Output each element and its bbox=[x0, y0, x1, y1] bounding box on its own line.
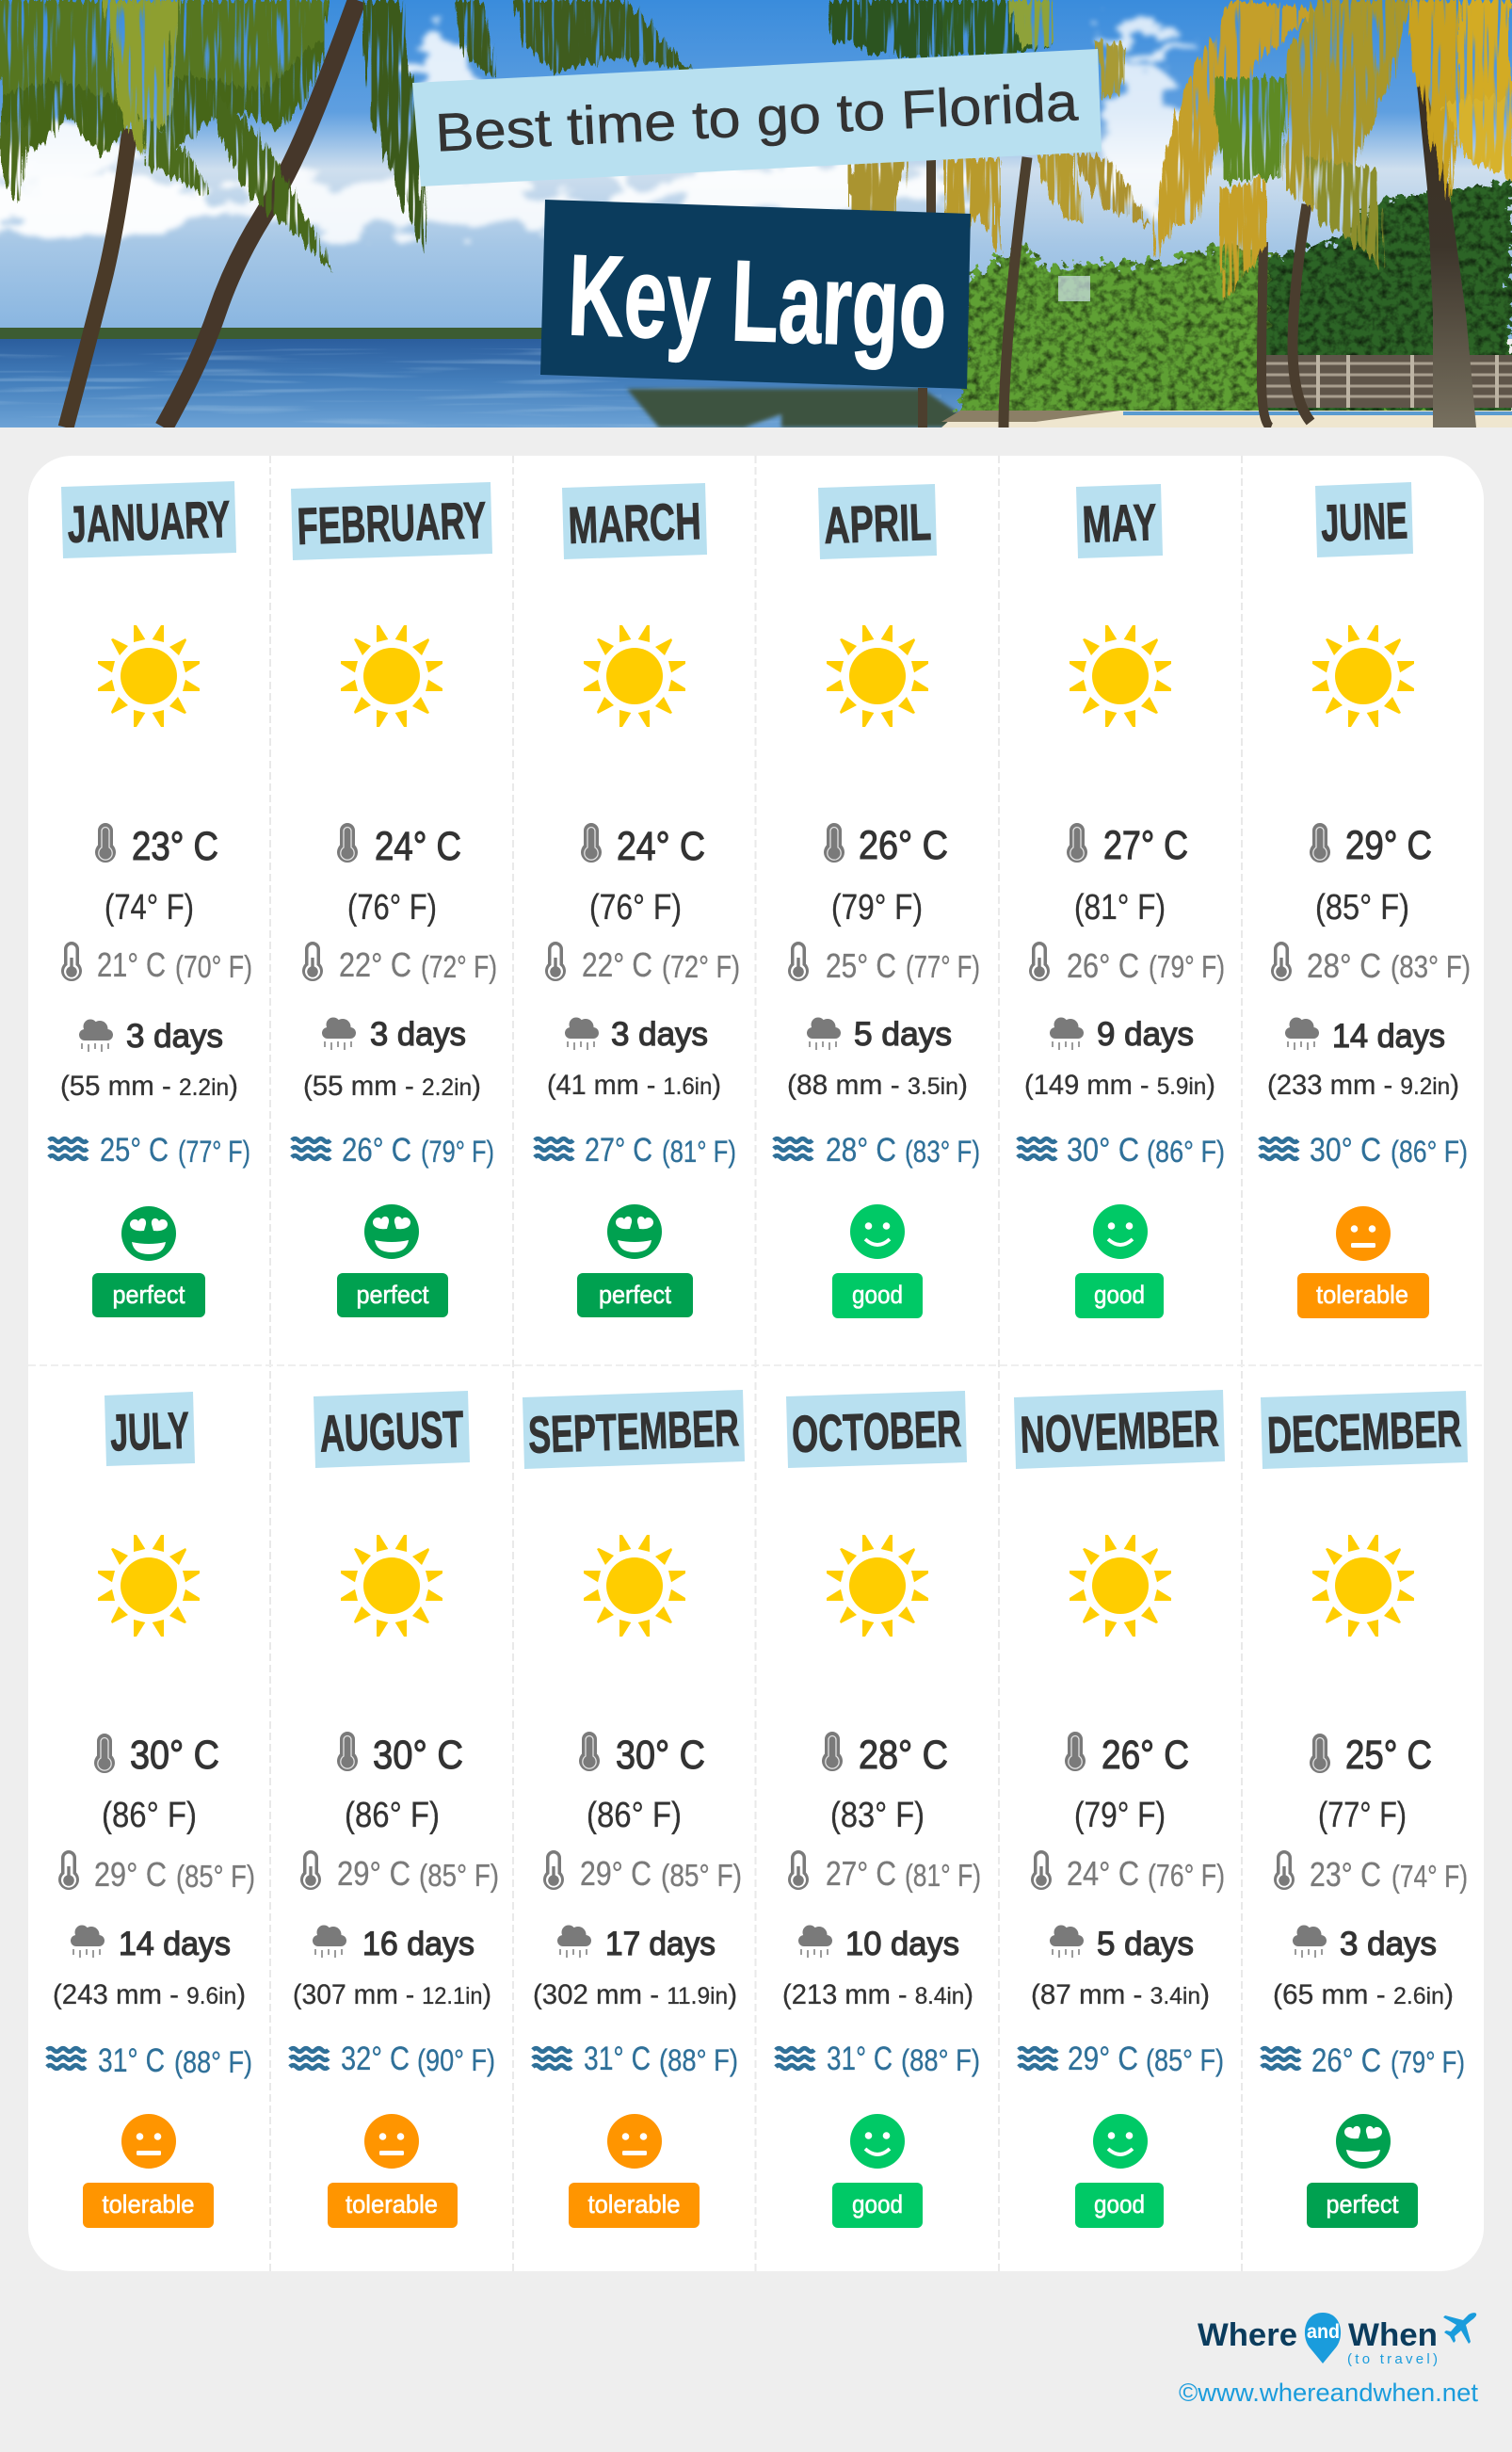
March heading bbox=[562, 483, 707, 559]
August low temperature bbox=[300, 1850, 499, 1893]
November high temperature bbox=[1065, 1732, 1189, 1835]
November rating: good bbox=[1094, 2190, 1145, 2218]
March heading: MARCH bbox=[568, 492, 702, 555]
April rating: good bbox=[852, 1281, 903, 1309]
November rainfall: 5 days bbox=[1097, 1926, 1194, 1962]
sand bbox=[941, 411, 1512, 427]
September sun icon bbox=[584, 1535, 685, 1637]
December rainfall: (65 mm - 2.6in) bbox=[1273, 1979, 1454, 2010]
February sun icon bbox=[341, 625, 442, 727]
March low temperature bbox=[545, 942, 740, 984]
December low temperature: (74° F) bbox=[1391, 1859, 1468, 1894]
November sea temperature: (85° F) bbox=[1146, 2043, 1224, 2077]
July rating: tolerable bbox=[102, 2190, 194, 2218]
September low temperature: 29° C bbox=[580, 1854, 651, 1893]
September heading: SEPTEMBER bbox=[527, 1398, 740, 1464]
January high temperature bbox=[95, 823, 218, 928]
month: October bbox=[776, 1391, 981, 2228]
May rating: good bbox=[1094, 1281, 1145, 1309]
May high temperature bbox=[1067, 823, 1188, 928]
November sea temperature bbox=[1019, 2041, 1224, 2077]
July high temperature: 30° C bbox=[130, 1733, 219, 1778]
panel: months table bbox=[28, 456, 1484, 2271]
October low temperature: 27° C bbox=[826, 1854, 896, 1893]
July sea temperature: 31° C bbox=[98, 2042, 165, 2079]
April sun icon bbox=[827, 625, 928, 727]
right and middle trunks bbox=[923, 157, 1311, 427]
June high temperature: 29° C bbox=[1345, 823, 1432, 868]
month: January bbox=[49, 481, 252, 1317]
October rainfall bbox=[782, 1925, 973, 2010]
September rating: tolerable bbox=[587, 2190, 680, 2218]
September sea temperature: (88° F) bbox=[659, 2043, 738, 2077]
month: February bbox=[291, 482, 497, 1317]
March sun icon bbox=[584, 625, 685, 727]
September rainfall: 17 days bbox=[605, 1926, 716, 1962]
April sea temperature: 28° C bbox=[826, 1132, 896, 1169]
November heading bbox=[1014, 1390, 1225, 1469]
May high temperature: 27° C bbox=[1103, 823, 1188, 868]
November rainfall: (87 mm - 3.4in) bbox=[1031, 1979, 1210, 2010]
icon: airplane bbox=[1443, 2313, 1476, 2344]
April rating bbox=[832, 1204, 923, 1318]
January low temperature: (70° F) bbox=[175, 949, 252, 984]
June low temperature bbox=[1271, 942, 1471, 985]
April high temperature: 26° C bbox=[859, 823, 948, 868]
September low temperature bbox=[543, 1850, 742, 1893]
October low temperature bbox=[788, 1850, 981, 1893]
December low temperature: 23° C bbox=[1310, 1855, 1381, 1894]
April rainfall bbox=[787, 1016, 968, 1101]
March rainfall bbox=[547, 1016, 721, 1101]
February high temperature: 24° C bbox=[375, 824, 461, 869]
foliage bbox=[960, 182, 1512, 427]
August heading bbox=[314, 1391, 470, 1468]
March rainfall: 3 days bbox=[611, 1016, 708, 1053]
January sea temperature: (77° F) bbox=[178, 1135, 250, 1169]
month: August bbox=[290, 1391, 499, 2228]
November rainfall bbox=[1031, 1925, 1210, 2010]
January heading: JANUARY bbox=[67, 490, 232, 554]
October high temperature: (83° F) bbox=[830, 1796, 925, 1835]
left palm trunks bbox=[66, 0, 357, 427]
October sea temperature: 31° C bbox=[827, 2041, 893, 2077]
February low temperature bbox=[302, 942, 497, 984]
August high temperature bbox=[337, 1732, 463, 1835]
January sea temperature bbox=[49, 1132, 250, 1169]
November sea temperature: 29° C bbox=[1068, 2041, 1138, 2077]
June sea temperature: (86° F) bbox=[1391, 1135, 1468, 1169]
March low temperature: 22° C bbox=[582, 945, 652, 984]
February high temperature: (76° F) bbox=[347, 888, 437, 928]
January rainfall bbox=[60, 1018, 238, 1102]
February rainfall: 3 days bbox=[370, 1016, 466, 1053]
February heading: FEBRUARY bbox=[297, 491, 488, 556]
September low temperature: (85° F) bbox=[661, 1858, 742, 1893]
June rainfall bbox=[1267, 1017, 1459, 1101]
August rating bbox=[328, 2114, 458, 2228]
April heading bbox=[818, 484, 937, 559]
March rating: perfect bbox=[599, 1281, 671, 1309]
October rating bbox=[832, 2114, 923, 2228]
August sun icon bbox=[341, 1535, 442, 1637]
October sea temperature bbox=[776, 2041, 980, 2077]
March high temperature: (76° F) bbox=[589, 888, 682, 928]
November low temperature bbox=[1031, 1850, 1225, 1893]
December high temperature: (77° F) bbox=[1318, 1796, 1407, 1835]
September high temperature: (86° F) bbox=[587, 1796, 682, 1835]
July heading bbox=[105, 1392, 195, 1466]
January low temperature bbox=[61, 942, 252, 984]
May low temperature: (79° F) bbox=[1149, 949, 1225, 984]
January rainfall: 3 days bbox=[126, 1018, 223, 1055]
October low temperature: (81° F) bbox=[905, 1858, 981, 1893]
January sun icon bbox=[98, 625, 200, 727]
middle palm fronds bbox=[828, 0, 1150, 254]
July heading: JULY bbox=[109, 1401, 190, 1461]
May high temperature: (81° F) bbox=[1074, 888, 1166, 928]
August low temperature: (85° F) bbox=[419, 1858, 499, 1893]
December sun icon bbox=[1312, 1535, 1414, 1637]
December rating: perfect bbox=[1326, 2190, 1399, 2218]
May rainfall bbox=[1024, 1016, 1215, 1101]
logo: Where and When bbox=[1198, 2313, 1476, 2367]
January heading bbox=[61, 481, 236, 558]
banner: title: Key Largo bbox=[566, 231, 949, 372]
right palm fronds bbox=[1153, 0, 1512, 301]
May low temperature: 26° C bbox=[1067, 946, 1139, 985]
May sea temperature: (86° F) bbox=[1147, 1135, 1225, 1169]
banner: title bbox=[540, 200, 971, 389]
month: June bbox=[1260, 482, 1471, 1318]
February sea temperature: 26° C bbox=[342, 1132, 411, 1169]
logo: Where and When: and bbox=[1307, 2321, 1340, 2343]
August high temperature: 30° C bbox=[373, 1733, 463, 1778]
month: September bbox=[523, 1390, 745, 2228]
month: December bbox=[1261, 1391, 1468, 2228]
March high temperature: 24° C bbox=[617, 824, 705, 869]
October heading: OCTOBER bbox=[791, 1399, 962, 1463]
November high temperature: 26° C bbox=[1102, 1733, 1189, 1778]
April rainfall: 5 days bbox=[854, 1016, 952, 1053]
May rainfall: (149 mm - 5.9in) bbox=[1024, 1070, 1215, 1101]
June rainfall: (233 mm - 9.2in) bbox=[1267, 1070, 1459, 1101]
January rating: perfect bbox=[113, 1281, 185, 1309]
May sea temperature: 30° C bbox=[1067, 1132, 1139, 1169]
month: July bbox=[47, 1392, 255, 2228]
April low temperature bbox=[788, 942, 980, 985]
October high temperature bbox=[822, 1732, 948, 1835]
August rainfall bbox=[293, 1925, 491, 2010]
March sea temperature: (81° F) bbox=[662, 1135, 736, 1169]
October heading bbox=[786, 1391, 967, 1468]
January low temperature: 21° C bbox=[97, 945, 166, 984]
June rainfall: 14 days bbox=[1332, 1018, 1445, 1055]
June sea temperature bbox=[1260, 1132, 1468, 1169]
January high temperature: (74° F) bbox=[105, 888, 194, 928]
December sea temperature bbox=[1262, 2042, 1465, 2079]
left palm fronds bbox=[0, 0, 692, 273]
hero photo: palm trees beach bbox=[0, 0, 1512, 427]
June high temperature: (85° F) bbox=[1315, 888, 1409, 928]
August rainfall: (307 mm - 12.1in) bbox=[293, 1979, 491, 2010]
March sea temperature bbox=[535, 1132, 736, 1169]
October high temperature: 28° C bbox=[859, 1733, 948, 1778]
December rating bbox=[1307, 2114, 1418, 2228]
June low temperature: 28° C bbox=[1307, 946, 1381, 985]
February heading bbox=[291, 482, 492, 560]
July rating bbox=[83, 2114, 214, 2228]
May sun icon bbox=[1070, 625, 1171, 727]
June high temperature bbox=[1310, 823, 1432, 928]
July high temperature bbox=[94, 1733, 219, 1835]
February high temperature bbox=[337, 823, 461, 928]
April heading: APRIL bbox=[823, 492, 932, 555]
month: May bbox=[1018, 484, 1225, 1318]
September high temperature bbox=[579, 1732, 705, 1835]
July low temperature: (85° F) bbox=[176, 1859, 255, 1894]
July high temperature: (86° F) bbox=[102, 1796, 197, 1835]
October sun icon bbox=[827, 1535, 928, 1637]
September sea temperature bbox=[533, 2041, 738, 2077]
August sea temperature: (90° F) bbox=[417, 2043, 495, 2077]
December high temperature: 25° C bbox=[1345, 1733, 1432, 1778]
March sea temperature: 27° C bbox=[585, 1132, 652, 1169]
May heading bbox=[1076, 484, 1163, 558]
June rating bbox=[1297, 1206, 1429, 1318]
June rating: tolerable bbox=[1316, 1281, 1408, 1309]
July sea temperature: (88° F) bbox=[174, 2045, 252, 2079]
May sea temperature bbox=[1018, 1132, 1225, 1169]
July low temperature bbox=[58, 1850, 255, 1894]
June low temperature: (83° F) bbox=[1391, 949, 1471, 984]
February low temperature: 22° C bbox=[339, 945, 411, 984]
banner: subtitle bbox=[412, 49, 1102, 186]
January sea temperature: 25° C bbox=[100, 1132, 169, 1169]
December sea temperature: 26° C bbox=[1311, 2042, 1381, 2079]
July sea temperature bbox=[47, 2042, 252, 2079]
December rainfall: 3 days bbox=[1340, 1926, 1437, 1962]
month: November bbox=[1014, 1390, 1225, 2228]
September sea temperature: 31° C bbox=[584, 2041, 651, 2077]
August sea temperature bbox=[290, 2041, 495, 2077]
February rating bbox=[337, 1204, 448, 1317]
November sun icon bbox=[1070, 1535, 1171, 1637]
September heading bbox=[523, 1390, 745, 1469]
January high temperature: 23° C bbox=[132, 824, 218, 869]
December low temperature bbox=[1274, 1850, 1468, 1894]
July low temperature: 29° C bbox=[94, 1855, 167, 1894]
May heading: MAY bbox=[1082, 492, 1158, 554]
April high temperature bbox=[824, 823, 948, 928]
month: April bbox=[774, 484, 980, 1318]
April low temperature: (77° F) bbox=[906, 949, 980, 984]
April sea temperature bbox=[774, 1132, 980, 1169]
June heading bbox=[1315, 482, 1413, 557]
December sea temperature: (79° F) bbox=[1391, 2045, 1465, 2079]
August high temperature: (86° F) bbox=[345, 1796, 440, 1835]
August rating: tolerable bbox=[346, 2190, 438, 2218]
March high temperature bbox=[581, 823, 705, 928]
April high temperature: (79° F) bbox=[831, 888, 923, 928]
July sun icon bbox=[98, 1535, 200, 1637]
month: March bbox=[535, 483, 740, 1317]
February low temperature: (72° F) bbox=[421, 949, 497, 984]
logo: Where and When: (to travel) bbox=[1347, 2351, 1438, 2367]
January rating bbox=[92, 1206, 205, 1317]
July rainfall bbox=[53, 1925, 246, 2010]
February rainfall bbox=[303, 1016, 481, 1102]
December rainfall bbox=[1273, 1925, 1454, 2010]
April rainfall: (88 mm - 3.5in) bbox=[787, 1070, 968, 1101]
May rating bbox=[1075, 1204, 1164, 1318]
July rainfall: 14 days bbox=[119, 1926, 231, 1962]
February rainfall: (55 mm - 2.2in) bbox=[303, 1071, 481, 1102]
logo: Where and When: When bbox=[1348, 2317, 1438, 2353]
July rainfall: (243 mm - 9.6in) bbox=[53, 1979, 246, 2010]
November high temperature: (79° F) bbox=[1074, 1796, 1166, 1835]
September high temperature: 30° C bbox=[616, 1733, 705, 1778]
August sea temperature: 32° C bbox=[341, 2041, 410, 2077]
September rainfall: (302 mm - 11.9in) bbox=[533, 1979, 737, 2010]
June sun icon bbox=[1312, 625, 1414, 727]
banner: subtitle: Best time to go to Florida bbox=[434, 72, 1080, 164]
May low temperature bbox=[1029, 942, 1225, 985]
December high temperature bbox=[1310, 1733, 1432, 1835]
boardwalk bbox=[1265, 355, 1512, 408]
logo: Where and When: Where bbox=[1198, 2317, 1297, 2353]
copyright url: ©www.whereandwhen.net bbox=[1179, 2379, 1478, 2407]
November low temperature: 24° C bbox=[1067, 1854, 1139, 1893]
September rainfall bbox=[533, 1925, 737, 2010]
April low temperature: 25° C bbox=[826, 946, 896, 985]
October rainfall: 10 days bbox=[845, 1926, 959, 1962]
August rainfall: 16 days bbox=[362, 1926, 475, 1962]
February rating: perfect bbox=[356, 1281, 429, 1309]
March rating bbox=[577, 1204, 693, 1317]
November low temperature: (76° F) bbox=[1148, 1858, 1225, 1893]
March low temperature: (72° F) bbox=[662, 949, 740, 984]
February sea temperature: (79° F) bbox=[421, 1135, 494, 1169]
March rainfall: (41 mm - 1.6in) bbox=[547, 1070, 721, 1101]
October rating: good bbox=[852, 2190, 903, 2218]
June sea temperature: 30° C bbox=[1310, 1132, 1381, 1169]
October rainfall: (213 mm - 8.4in) bbox=[782, 1979, 973, 2010]
October sea temperature: (88° F) bbox=[901, 2043, 980, 2077]
August heading: AUGUST bbox=[319, 1399, 465, 1463]
April sea temperature: (83° F) bbox=[905, 1135, 980, 1169]
February sea temperature bbox=[292, 1132, 494, 1169]
September rating bbox=[569, 2114, 700, 2228]
August low temperature: 29° C bbox=[337, 1854, 410, 1893]
May rainfall: 9 days bbox=[1097, 1016, 1194, 1053]
November heading: NOVEMBER bbox=[1020, 1398, 1220, 1464]
June heading: JUNE bbox=[1320, 491, 1408, 553]
November rating bbox=[1075, 2114, 1164, 2228]
January rainfall: (55 mm - 2.2in) bbox=[60, 1071, 238, 1102]
icon: map pin bbox=[1305, 2313, 1341, 2363]
